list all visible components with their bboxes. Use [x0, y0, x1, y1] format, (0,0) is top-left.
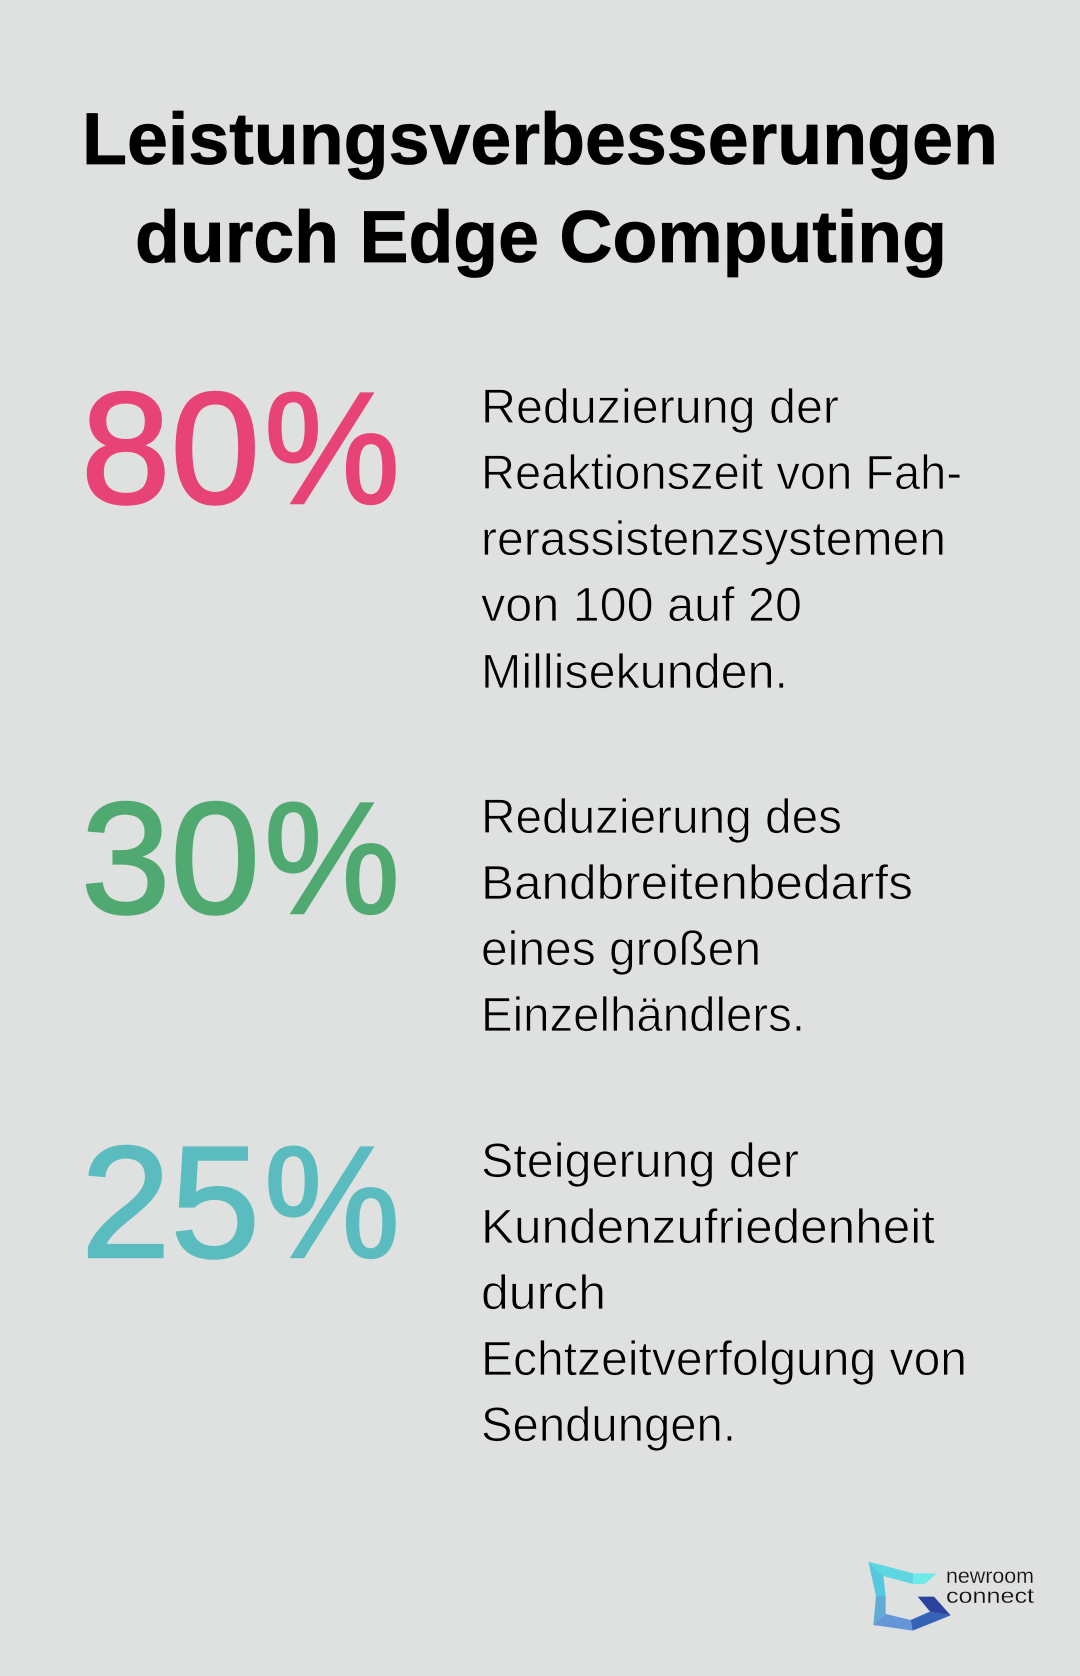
description: customer satisfaction: Sendungen. [481, 1398, 736, 1452]
description: customer satisfaction [481, 1134, 967, 1452]
title: Leistungsverbesserungen [82, 99, 998, 180]
title [82, 99, 998, 278]
description: response time: Millisekunden. [481, 645, 788, 699]
description: customer satisfaction: Steigerung der [481, 1134, 799, 1188]
panel: 25 percent stat [81, 1113, 967, 1452]
stat value: 80% [81, 359, 400, 537]
stat value: 80%: % [264, 359, 400, 537]
logo text [946, 1565, 1034, 1608]
icon: logo mark [868, 1562, 951, 1631]
stat value: 80%: 80 [81, 359, 260, 537]
stat value: 30%: % [264, 769, 400, 947]
description: response time: von 100 auf 20 [481, 578, 802, 632]
stat value: 25%: 25 [81, 1113, 260, 1291]
description: bandwidth: Reduzierung des [481, 790, 842, 844]
description: customer satisfaction: Kundenzufriedenheit [481, 1200, 936, 1254]
title: durch Edge Computing [135, 197, 947, 278]
description: response time [481, 380, 962, 699]
panel: 80 percent stat [81, 359, 962, 699]
stat value: 25%: % [264, 1113, 400, 1291]
description: response time: Reduzierung der [481, 380, 839, 434]
description: bandwidth [481, 790, 913, 1042]
description: customer satisfaction: durch [481, 1266, 606, 1320]
stat value: 30%: 30 [81, 769, 260, 947]
logo text: newroom [946, 1565, 1034, 1588]
panel: 30 percent stat [81, 769, 913, 1042]
stat value: 30% [81, 769, 400, 947]
description: bandwidth: Einzelhändlers. [481, 988, 805, 1042]
description: bandwidth: Bandbreitenbedarfs [481, 856, 913, 910]
description: response time: rerassistenzsystemen [481, 512, 946, 566]
description: response time: Reaktionszeit von Fah- [481, 446, 962, 500]
logo: newroom connect [868, 1562, 1034, 1631]
description: customer satisfaction: Echtzeitverfolgung von [481, 1332, 967, 1386]
logo text: connect [946, 1585, 1034, 1608]
description: bandwidth: eines großen [481, 922, 761, 976]
stat value: 25% [81, 1113, 400, 1291]
